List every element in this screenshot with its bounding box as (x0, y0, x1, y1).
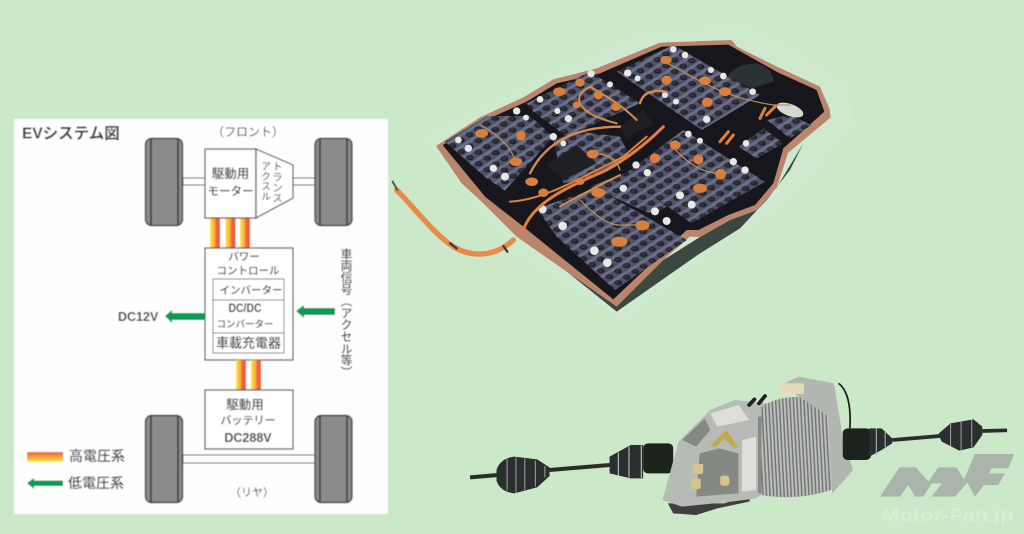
panel: EV system diagram (14, 119, 388, 514)
icon: front left wheel (146, 138, 182, 226)
drive battery box: DC288V (224, 431, 272, 445)
label: front: （フロント） (212, 125, 284, 139)
front axle (183, 178, 315, 185)
transaxle: アクスル (258, 161, 270, 201)
pack dark interior (443, 45, 824, 299)
housing highlights (710, 405, 756, 492)
pale halo behind pack (423, 27, 853, 320)
arrow: vehicle signal input (296, 305, 335, 318)
drive battery box: バッテリー (220, 414, 276, 427)
drive battery box: 駆動用 (226, 397, 264, 412)
power control box: インバーター (220, 284, 282, 296)
legend: high voltage (27, 448, 125, 464)
housing shading (682, 417, 765, 497)
icon: rear left wheel (146, 416, 182, 502)
power control box: DC/DC (228, 303, 262, 315)
icon: front right wheel (315, 138, 352, 226)
high-voltage cables: power control to battery (236, 360, 261, 390)
high-voltage orange cable (393, 182, 513, 254)
left black coupling (643, 443, 673, 473)
title: EVシステム図 (22, 126, 120, 142)
legend: low voltage: 低電圧系 (68, 475, 124, 491)
power control box (205, 248, 293, 360)
drive motor box: モーター (208, 185, 254, 198)
power control box: コントロール (216, 265, 280, 277)
power control box: 車載充電器 (216, 336, 281, 350)
pan flange (436, 40, 831, 307)
legend: high voltage: 高電圧系 (69, 448, 125, 464)
power control box: コンバーター (216, 318, 274, 330)
drive motor box (205, 149, 256, 218)
control units (547, 110, 653, 180)
label: vehicle signal: 車両信号（アクセル等） (339, 247, 353, 378)
finned motor casing (761, 397, 836, 497)
logo wordmark: Motor-Fan.jp (882, 504, 1013, 525)
drive motor box: 駆動用 (212, 166, 249, 181)
left inner boot (610, 445, 643, 478)
orange wire harness (480, 63, 790, 230)
arrow: DC12V output (165, 310, 205, 323)
label: DC12V: DC12V (118, 310, 159, 324)
brass bracket (710, 430, 739, 447)
icon: rear right wheel (315, 416, 352, 502)
drive battery box (205, 390, 293, 449)
white cell terminals (455, 46, 756, 267)
orange connectors (475, 56, 731, 247)
sensor cable (839, 383, 850, 428)
left outer boot (496, 457, 549, 493)
right outer boot (938, 419, 982, 451)
right drive shaft (892, 430, 1007, 440)
right housing (781, 377, 853, 493)
cream connector (779, 383, 804, 394)
high-voltage cables: motor to power control (210, 218, 250, 248)
legend: low voltage (27, 475, 124, 491)
left drive shaft (470, 465, 610, 477)
logo: Motor-Fan watermark (880, 454, 1014, 525)
motor housing (727, 63, 773, 88)
battery pack photo (393, 27, 853, 320)
rear axle (183, 455, 315, 463)
logo mark (880, 454, 1014, 497)
right black coupling (843, 428, 871, 460)
transaxle photo (470, 377, 1007, 515)
bottom pan (668, 493, 753, 515)
connector stubs (749, 396, 765, 405)
white insert (775, 100, 805, 120)
transaxle: トランス (271, 161, 283, 203)
power control box: パワー (228, 251, 260, 263)
pan underside shadow (523, 143, 803, 312)
brass fittings (691, 464, 729, 489)
battery modules (445, 45, 812, 290)
right inner boot (869, 428, 892, 457)
transaxle (256, 149, 293, 218)
left housing (663, 400, 769, 507)
label: rear: （リヤ） (230, 486, 274, 499)
